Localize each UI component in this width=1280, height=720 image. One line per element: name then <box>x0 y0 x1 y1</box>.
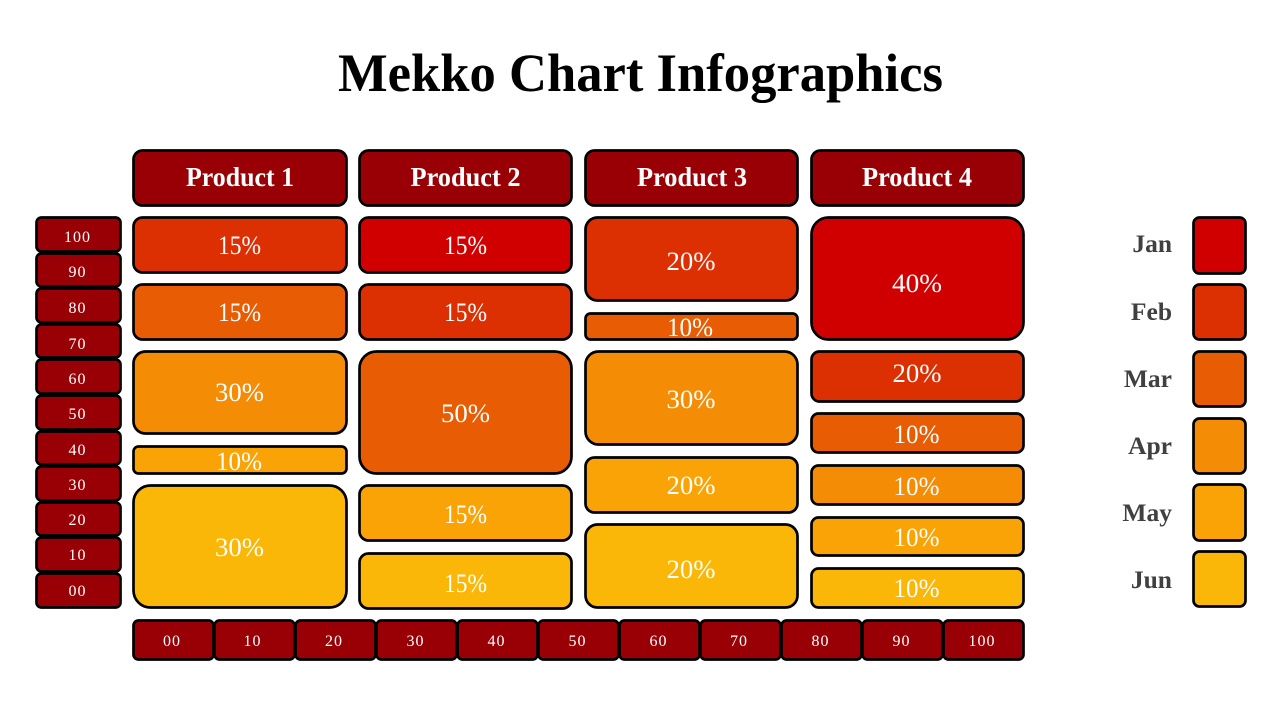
Product 4 segment 10% <box>812 466 1024 504</box>
x axis: 70 <box>730 633 748 650</box>
legend item: Feb <box>1131 284 1246 340</box>
Product 3 segment 20% <box>586 524 798 608</box>
title: Mekko Chart Infographics <box>338 43 943 103</box>
y axis: 90 <box>68 264 86 281</box>
Product 3 segment 10%: 10% <box>667 313 713 342</box>
column: Product 4 <box>812 218 1024 608</box>
x axis: 60 <box>650 633 668 650</box>
Product 4 segment 10% <box>812 518 1024 556</box>
Product 2 segment 15%: 15% <box>444 500 487 529</box>
header: Product 4 <box>812 150 1024 206</box>
y axis: 00 <box>68 583 86 600</box>
Product 3 segment 30% <box>586 352 798 444</box>
legend item: May <box>1122 484 1246 540</box>
Product 4 segment 10%: 10% <box>894 420 940 449</box>
header: Product 1 <box>134 150 346 206</box>
header: Product 4: Product 4 <box>862 162 972 192</box>
legend <box>1122 218 1246 606</box>
Product 1 segment 30% <box>134 486 346 608</box>
Product 2 segment 15% <box>360 218 572 272</box>
Product 1 segment 10%: 10% <box>216 447 262 476</box>
x axis: 100 <box>968 633 996 650</box>
Product 3 segment 30%: 30% <box>666 385 716 414</box>
Product 1 segment 15% <box>134 218 346 272</box>
column: Product 2 <box>360 218 572 608</box>
Product 2 segment 15%: 15% <box>444 231 487 260</box>
Product 1 segment 15%: 15% <box>218 231 261 260</box>
x axis: 10 <box>244 633 262 650</box>
Product 4 segment 10% <box>812 414 1024 452</box>
y axis: 80 <box>68 300 86 317</box>
x axis <box>134 620 1024 660</box>
column: Product 1 <box>134 218 346 608</box>
Product 2 segment 15%: 15% <box>444 298 487 327</box>
Product 3 segment 10% <box>586 313 798 342</box>
Product 4 segment 40%: 40% <box>892 269 942 298</box>
x axis: 00 <box>163 633 181 650</box>
y axis: 60 <box>68 371 86 388</box>
y axis: 100 <box>64 229 91 246</box>
Product 1 segment 30% <box>134 352 346 434</box>
Product 4 segment 20% <box>812 352 1024 402</box>
Product 1 segment 15%: 15% <box>218 298 261 327</box>
legend item: Apr <box>1128 418 1246 474</box>
Product 1 segment 30%: 30% <box>215 533 264 562</box>
column: Product 3 <box>586 218 798 608</box>
y axis: 20 <box>68 512 86 529</box>
x axis: 40 <box>488 633 506 650</box>
Product 1 segment 10% <box>134 446 346 476</box>
Product 2 segment 15%: 15% <box>444 569 487 598</box>
x axis: 50 <box>568 633 586 650</box>
Product 4 segment 10%: 10% <box>894 574 940 603</box>
legend item: May: May <box>1122 498 1172 527</box>
legend item: Jan <box>1132 218 1246 274</box>
y axis: 40 <box>68 442 86 459</box>
x axis: 20 <box>325 633 343 650</box>
legend item: Jun: Jun <box>1131 565 1172 594</box>
Product 2 segment 15% <box>360 554 572 608</box>
Product 4 segment 10% <box>812 568 1024 608</box>
x axis: 30 <box>406 633 424 650</box>
legend item: Mar: Mar <box>1124 364 1172 393</box>
header: Product 2: Product 2 <box>410 162 520 192</box>
y axis: 30 <box>68 477 86 494</box>
header: Product 3: Product 3 <box>637 162 747 192</box>
Product 3 segment 20%: 20% <box>666 471 716 500</box>
x axis: 90 <box>892 633 910 650</box>
Product 4 segment 20%: 20% <box>892 359 942 388</box>
legend item: Jan: Jan <box>1132 229 1172 258</box>
legend item: Apr: Apr <box>1128 431 1172 460</box>
Product 2 segment 15% <box>360 486 572 540</box>
Product 1 segment 30%: 30% <box>215 378 264 407</box>
y axis: 70 <box>68 336 86 353</box>
Product 2 segment 50%: 50% <box>441 399 490 428</box>
Product 3 segment 20% <box>586 458 798 512</box>
Product 1 segment 15% <box>134 284 346 340</box>
legend item: Mar <box>1124 352 1246 406</box>
legend item: Feb: Feb <box>1131 297 1172 326</box>
Product 4 segment 10%: 10% <box>894 472 940 501</box>
legend item: Jun <box>1131 552 1246 606</box>
Product 4 segment 10%: 10% <box>894 523 940 552</box>
Product 2 segment 50% <box>360 352 572 474</box>
x axis: 80 <box>812 633 830 650</box>
header: Product 1: Product 1 <box>186 162 294 192</box>
y axis <box>36 218 120 608</box>
Product 3 segment 20% <box>586 218 798 300</box>
y axis: 50 <box>68 406 86 423</box>
Product 3 segment 20%: 20% <box>666 247 716 276</box>
header: Product 2 <box>360 150 572 206</box>
header: Product 3 <box>586 150 798 206</box>
Product 3 segment 20%: 20% <box>666 555 716 584</box>
product headers <box>134 150 1024 206</box>
Product 4 segment 40% <box>812 218 1024 340</box>
y axis: 10 <box>68 547 86 564</box>
Product 2 segment 15% <box>360 284 572 340</box>
